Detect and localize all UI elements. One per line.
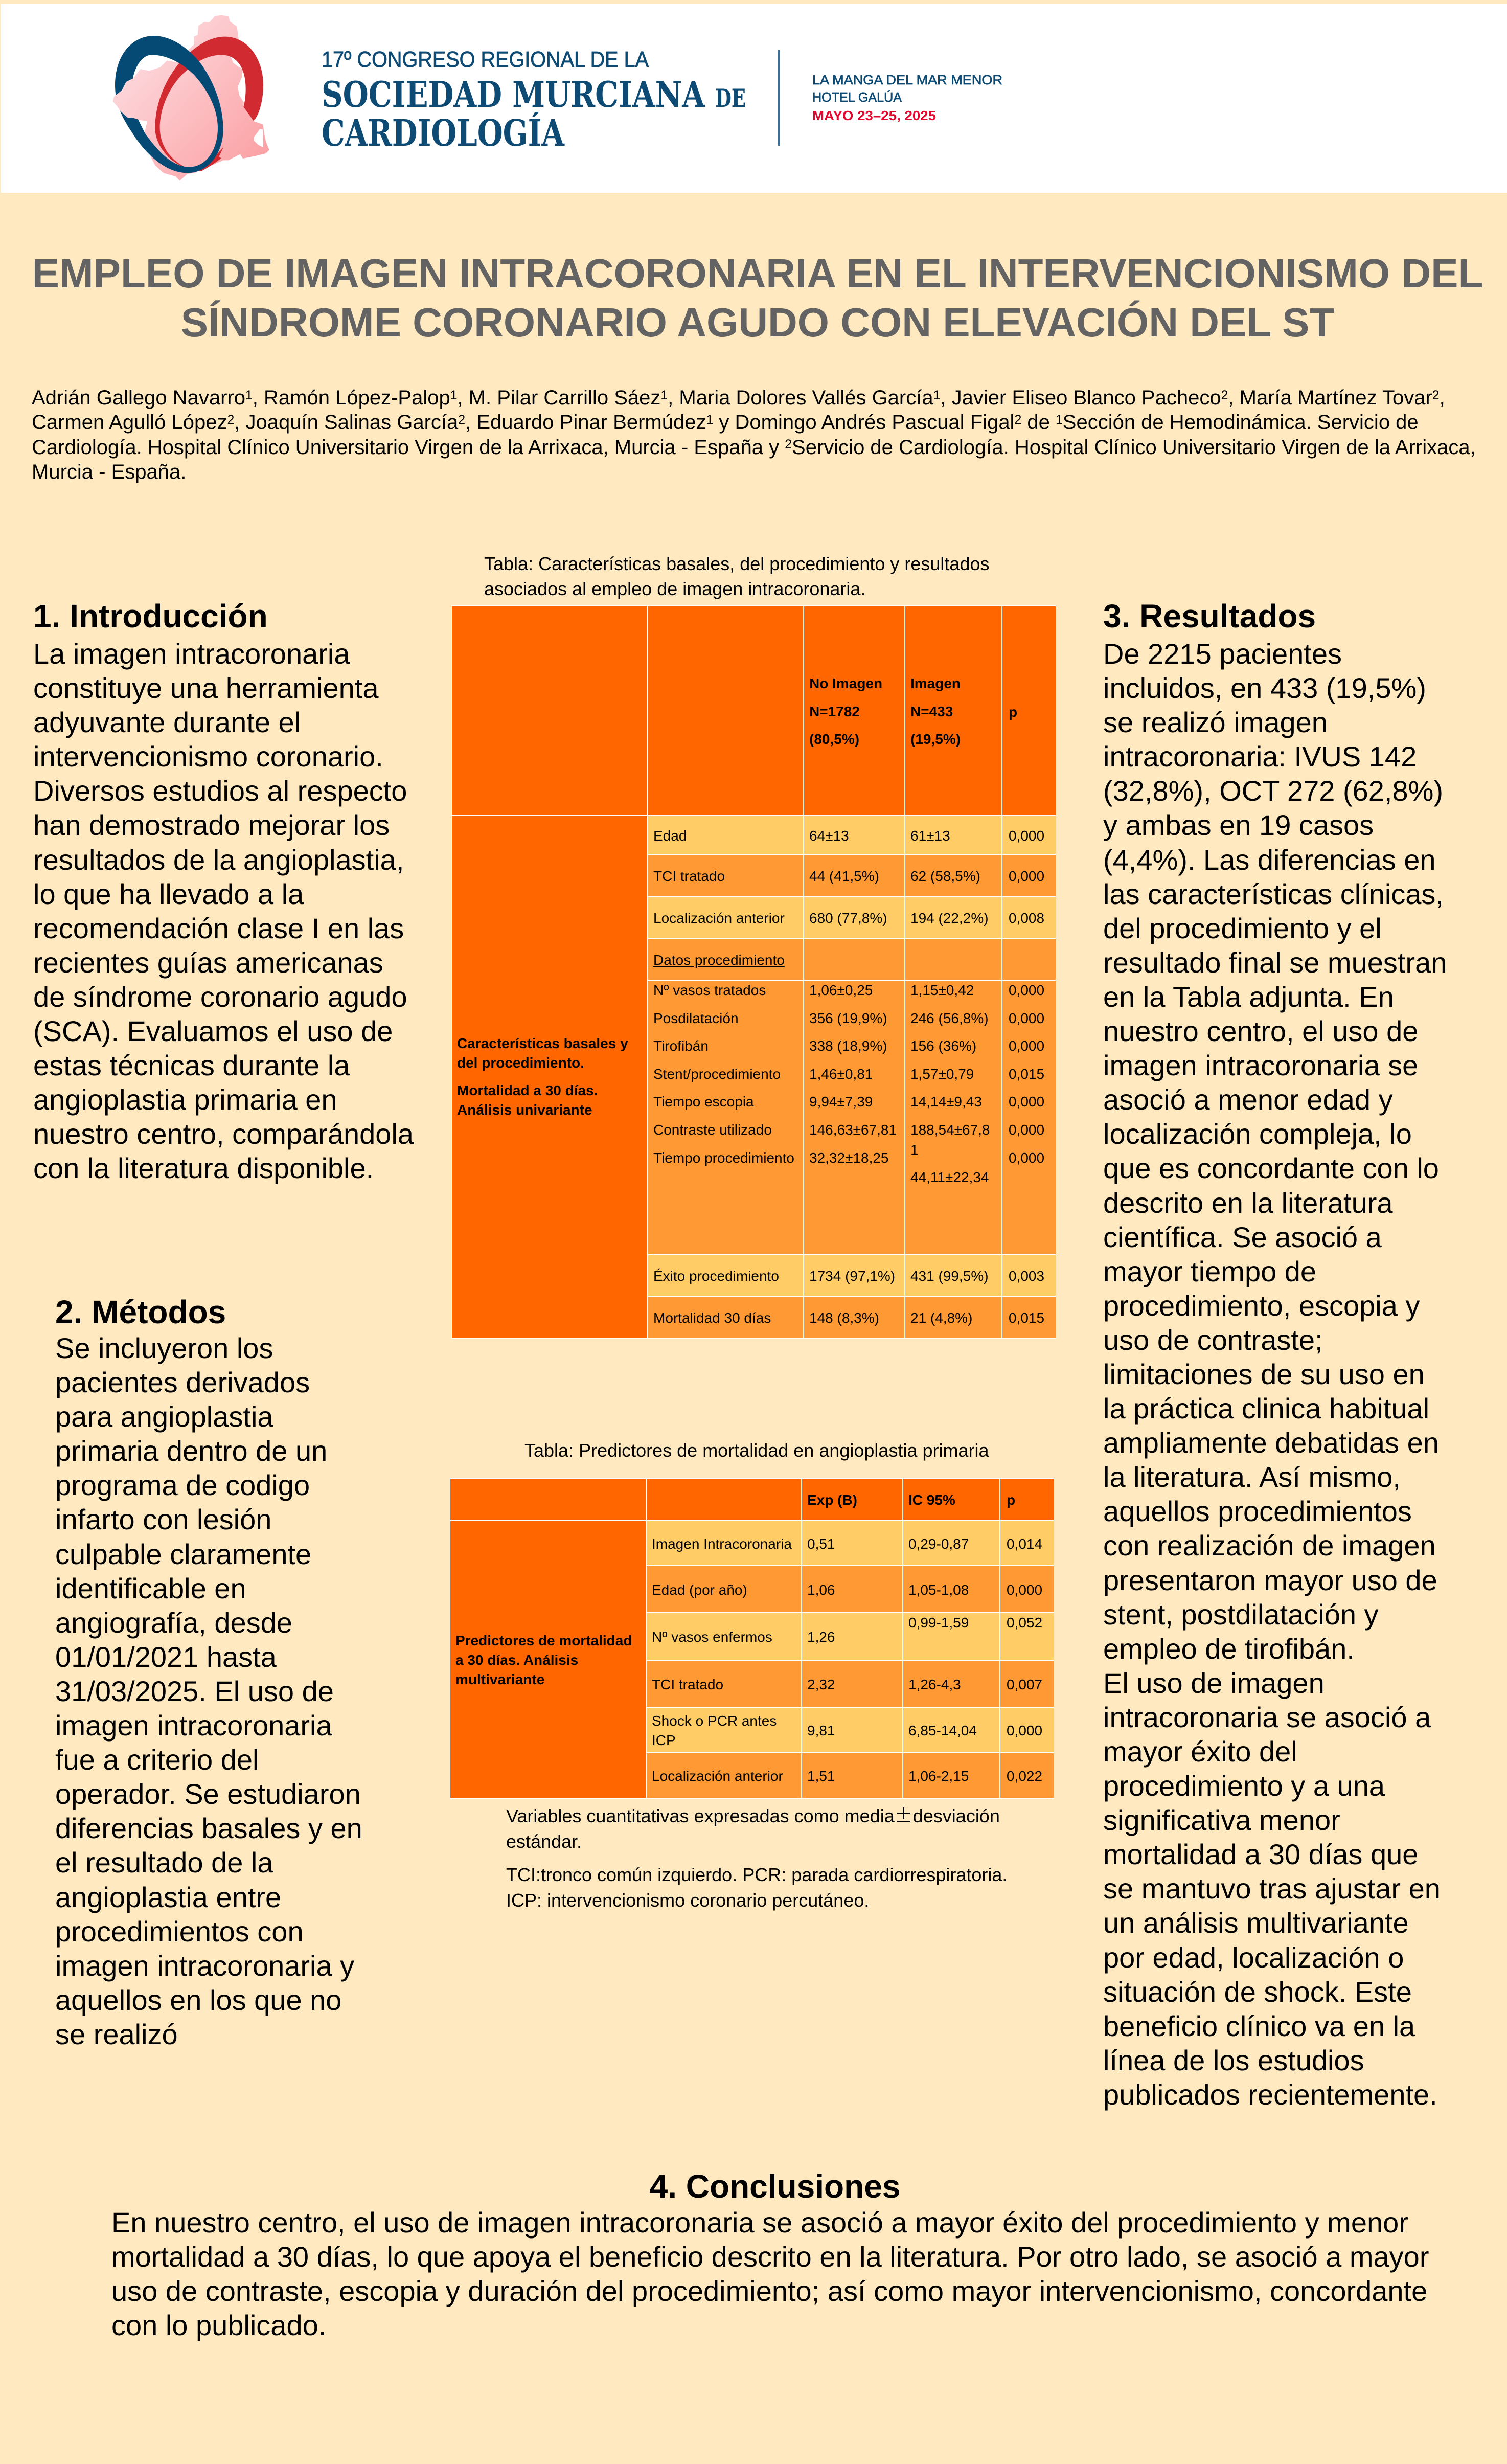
text: métodos: diferencias basales y en (55, 1812, 362, 1844)
text: resultados: resultado final se muestran (1103, 946, 1447, 979)
row: mortalidad 30 días: 21 (4,8%) (910, 1310, 972, 1325)
text: resultados: las características clínicas, (1103, 878, 1444, 910)
table header row: (80,5%) (809, 731, 859, 747)
text: conclusiones (111, 2205, 1429, 2342)
text: resultados: línea de los estudios (1103, 2044, 1364, 2076)
text: resultados: (4,4%). Las diferencias en (1103, 844, 1436, 876)
text: resultados: empleo de tirofibán. (1103, 1633, 1355, 1665)
table header row (452, 606, 1056, 815)
rows: variables del procedimiento: 1,46±0,81 (809, 1066, 873, 1082)
table: predictores de mortalidad (450, 1478, 1054, 1799)
text: métodos: identificable en (55, 1572, 246, 1604)
text: conclusiones: mortalidad a 30 días, lo que apoya el beneficio descrito en la literatura. Por otro lado, se asoció a mayor (111, 2241, 1429, 2273)
rows: variables del procedimiento: Contraste utilizado (653, 1122, 772, 1138)
table header row: (19,5%) (910, 731, 961, 747)
text: resultados: se realizó imagen (1103, 706, 1328, 738)
text: resultados: situación de shock. Este (1103, 1976, 1412, 2008)
text: introducción: con la literatura disponible. (33, 1152, 374, 1184)
row label: características basales y del procedimiento (452, 816, 647, 1338)
text: métodos: programa de codigo (55, 1469, 310, 1501)
rows: variables del procedimiento: Tirofibán (653, 1038, 709, 1054)
row: datos procedimiento (648, 939, 1056, 980)
text: resultados: uso de contraste; (1103, 1324, 1323, 1356)
row: vasos enfermos: Nº vasos enfermos (652, 1629, 772, 1645)
text: métodos: primaria dentro de un (55, 1435, 327, 1467)
text: métodos: procedimientos con (55, 1915, 304, 1948)
row: shock o PCR: ICP (652, 1732, 676, 1748)
row: edad: 61±13 (910, 827, 950, 844)
row: vasos enfermos (647, 1613, 1054, 1660)
text: métodos: imagen intracoronaria y (55, 1950, 354, 1982)
table: características basales (451, 605, 1056, 1339)
row: edad por año: 0,000 (1007, 1582, 1042, 1597)
text: resultados: limitaciones de su uso en (1103, 1358, 1425, 1390)
authors and affiliations: Carmen Agulló López2, Joaquín Salinas García2, Eduardo Pinar Bermúdez1 y Domingo Andrés Pascual Figal2 de 1Sección de Hemodinámica. Servicio de (32, 411, 1419, 434)
text: resultados: intracoronaria se asoció a (1103, 1701, 1431, 1733)
caption: tabla características basales (484, 553, 990, 599)
text: resultados: De 2215 pacientes (1103, 638, 1342, 670)
row: TCI tratado: 62 (58,5%) (910, 868, 980, 884)
text: métodos: infarto con lesión (55, 1503, 271, 1535)
table header row: N=433 (910, 704, 953, 719)
row: TCI tratado (647, 1661, 1054, 1707)
venue and date: LA MANGA DEL MAR MENOR (812, 72, 1002, 87)
table header row: Imagen (910, 675, 961, 691)
title: EMPLEO DE IMAGEN INTRACORONARIA EN EL INTERVENCIONISMO DEL (32, 251, 1483, 296)
row: vasos enfermos: 1,26 (807, 1629, 835, 1645)
row: edad por año: 1,05-1,08 (908, 1582, 969, 1597)
row: imagen intracoronaria: 0,014 (1007, 1536, 1042, 1551)
authors and affiliations (32, 387, 1476, 483)
text: resultados: (32,8%), OCT 272 (62,8%) (1103, 775, 1443, 807)
text: resultados: se mantuvo tras ajustar en (1103, 1872, 1441, 1905)
authors and affiliations: Murcia - España. (32, 461, 186, 483)
text: métodos: angiografía, desde (55, 1607, 292, 1639)
text: resultados: del procedimiento y el (1103, 912, 1382, 944)
text: resultados: localización compleja, lo (1103, 1118, 1412, 1150)
row: TCI tratado: 44 (41,5%) (809, 868, 879, 884)
table header row: p (1009, 704, 1017, 720)
row label: características basales y del procedimiento: del procedimiento. (457, 1055, 584, 1071)
row: imagen intracoronaria (647, 1521, 1054, 1565)
text: métodos (55, 1332, 362, 2050)
text: resultados: imagen intracoronaria se (1103, 1049, 1418, 1081)
text: resultados: científica. Se asoció a (1103, 1221, 1382, 1253)
heading: 3. Resultados: 3. Resultados (1103, 598, 1316, 635)
row: TCI tratado: TCI tratado (652, 1676, 723, 1692)
row: shock o PCR: Shock o PCR antes (652, 1713, 777, 1729)
row: edad: Edad (653, 827, 687, 844)
text: introducción: nuestro centro, comparándola (33, 1118, 414, 1150)
row: TCI tratado: TCI tratado (653, 868, 725, 884)
row: localización anterior: 680 (77,8%) (809, 910, 887, 926)
rows: variables del procedimiento: Stent/procedimiento (653, 1066, 781, 1082)
row: TCI tratado: 2,32 (807, 1676, 835, 1692)
row: localización anterior: 194 (22,2%) (910, 910, 989, 926)
text: resultados: ampliamente debatidas en (1103, 1427, 1439, 1459)
text: métodos: operador. Se estudiaron (55, 1778, 361, 1810)
table header row (450, 1479, 1054, 1520)
heading: 1. Introducción: 1. Introducción (33, 598, 268, 635)
row: éxito procedimiento (648, 1255, 1056, 1296)
row: éxito procedimiento: Éxito procedimiento (653, 1268, 779, 1284)
row: mortalidad 30 días: 0,015 (1009, 1310, 1044, 1325)
row: localización anterior: Localización anterior (653, 910, 785, 926)
row: shock o PCR: 9,81 (807, 1723, 835, 1738)
text: resultados: El uso de imagen (1103, 1667, 1325, 1699)
heading: 4. Conclusiones: 4. Conclusiones (650, 2168, 900, 2205)
text: resultados: significativa menor (1103, 1804, 1340, 1836)
text: introducción: La imagen intracoronaria (33, 638, 350, 670)
row: localización anterior (648, 897, 1056, 938)
row: éxito procedimiento: 431 (99,5%) (910, 1268, 989, 1284)
row: TCI tratado: 0,007 (1007, 1676, 1042, 1692)
venue and date (812, 72, 1002, 123)
row: TCI tratado: 1,26-4,3 (908, 1676, 961, 1692)
rows: variables del procedimiento: 1 (910, 1142, 919, 1158)
text: resultados: presentaron mayor uso de (1103, 1564, 1437, 1596)
row: éxito procedimiento: 1734 (97,1%) (809, 1268, 895, 1284)
table header row: Exp (B) (807, 1492, 857, 1508)
text: conclusiones: En nuestro centro, el uso de imagen intracoronaria se asoció a mayor éxito del procedimiento y menor (111, 2206, 1408, 2239)
row: localización anterior: 0,008 (1009, 910, 1044, 926)
text: métodos: fue a criterio del (55, 1744, 259, 1776)
caption: tabla características basales: Tabla: Características basales, del procedimiento y resultados (484, 553, 990, 574)
row: shock o PCR: 6,85-14,04 (908, 1723, 977, 1738)
table footnotes (506, 1803, 1007, 1913)
rows: variables del procedimiento: 44,11±22,34 (910, 1169, 989, 1185)
rows: variables del procedimiento: 0,015 (1009, 1066, 1044, 1082)
table footnotes: Variables cuantitativas expresadas como media±desviación (506, 1801, 1000, 1828)
text: introducción: han demostrado mejorar los (33, 809, 390, 841)
text: conclusiones: con lo publicado. (111, 2309, 326, 2341)
text: métodos: angioplastia entre (55, 1881, 281, 1913)
rows: variables del procedimiento: 338 (18,9%) (809, 1038, 887, 1054)
table footnotes: TCI:tronco común izquierdo. PCR: parada cardiorrespiratoria. (506, 1864, 1007, 1885)
row: localización anterior: 1,51 (807, 1768, 835, 1784)
row: éxito procedimiento: 0,003 (1009, 1268, 1044, 1284)
row: mortalidad 30 días: Mortalidad 30 días (653, 1310, 771, 1325)
row label: predictores de mortalidad a 30 días: a 30 días. Análisis (455, 1652, 578, 1668)
row: TCI tratado (648, 855, 1056, 896)
table header row: p (1007, 1492, 1015, 1508)
icon: logo heart rings over Murcia map (113, 15, 269, 180)
row: mortalidad 30 días: 148 (8,3%) (809, 1310, 879, 1325)
row: edad (648, 816, 1056, 854)
text: métodos: culpable claramente (55, 1538, 311, 1570)
text: introducción (33, 638, 414, 1184)
text: métodos: el resultado de la (55, 1846, 273, 1879)
text: introducción: angioplastia primaria en (33, 1083, 337, 1116)
table footnotes: estándar. (506, 1831, 582, 1852)
text: resultados: asoció a menor edad y (1103, 1083, 1393, 1116)
row label: predictores de mortalidad a 30 días: multivariante (455, 1671, 544, 1687)
text: resultados: beneficio clínico va en la (1103, 2010, 1415, 2042)
caption: tabla características basales: asociados al empleo de imagen intracoronaria. (484, 578, 865, 599)
row: imagen intracoronaria: 0,29-0,87 (908, 1536, 969, 1551)
row: vasos enfermos: 0,052 (1007, 1615, 1042, 1631)
rows: variables del procedimiento: 356 (19,9%) (809, 1010, 887, 1026)
rows: variables del procedimiento: Tiempo escopia (653, 1094, 754, 1110)
text: introducción: (SCA). Evaluamos el uso de (33, 1015, 393, 1047)
venue and date: HOTEL GALÚA (812, 89, 902, 105)
text: resultados (1103, 637, 1447, 2112)
row: localización anterior: Localización anterior (652, 1768, 783, 1784)
row label: características basales y del procedimiento: Características basales y (457, 1035, 628, 1051)
caption: tabla predictores: Tabla: Predictores de mortalidad en angioplastia primaria (524, 1440, 989, 1461)
text: resultados: stent, postdilatación y (1103, 1598, 1379, 1631)
table header row: No Imagen (809, 675, 882, 691)
text: métodos: 31/03/2025. El uso de (55, 1675, 334, 1707)
rows: variables del procedimiento: 156 (36%) (910, 1038, 976, 1054)
rows: variables del procedimiento: 0,000 (1009, 982, 1044, 998)
text: resultados: por edad, localización o (1103, 1941, 1404, 1974)
row: localización anterior: 0,022 (1007, 1768, 1042, 1784)
text: resultados: descrito en la literatura (1103, 1186, 1393, 1219)
row: edad: 64±13 (809, 827, 849, 844)
text: métodos: 01/01/2021 hasta (55, 1641, 277, 1673)
rows: variables del procedimiento (648, 981, 1056, 1254)
text: resultados: procedimiento y a una (1103, 1770, 1385, 1802)
text: resultados: en la Tabla adjunta. En (1103, 981, 1394, 1013)
rows: variables del procedimiento: 0,000 (1009, 1094, 1044, 1110)
rows: variables del procedimiento: 0,000 (1009, 1122, 1044, 1138)
text: introducción: resultados de la angioplastia, (33, 844, 404, 876)
text: introducción: constituye una herramienta (33, 672, 378, 704)
text: introducción: estas técnicas durante la (33, 1049, 350, 1081)
row label: características basales y del procedimiento: Análisis univariante (457, 1102, 592, 1118)
text: resultados: nuestro centro, el uso de (1103, 1015, 1418, 1047)
text: introducción: lo que ha llevado a la (33, 878, 304, 910)
text: resultados: la práctica clinica habitual (1103, 1392, 1429, 1425)
text: introducción: recientes guías americanas (33, 946, 383, 979)
row: imagen intracoronaria: 0,51 (807, 1536, 835, 1551)
row: shock o PCR: 0,000 (1007, 1723, 1042, 1738)
row label: predictores de mortalidad a 30 días (450, 1521, 646, 1798)
text: resultados: con realización de imagen (1103, 1529, 1436, 1562)
text: métodos: se realizó (55, 2018, 178, 2050)
congress title (322, 47, 746, 154)
row: edad por año: Edad (por año) (652, 1582, 747, 1597)
text: resultados: mortalidad a 30 días que (1103, 1838, 1418, 1870)
row: localización anterior (647, 1753, 1054, 1798)
row: shock o PCR (647, 1708, 1054, 1752)
authors and affiliations: Adrián Gallego Navarro1, Ramón López-Palop1, M. Pilar Carrillo Sáez1, Maria Dolores Vallés García1, Javier Eliseo Blanco Pacheco2, María Martínez Tovar2, (32, 387, 1445, 409)
text: resultados: intracoronaria: IVUS 142 (1103, 740, 1417, 773)
rows: variables del procedimiento: 1,15±0,42 (910, 982, 974, 998)
row label: predictores de mortalidad a 30 días: Predictores de mortalidad (455, 1633, 632, 1648)
rows: variables del procedimiento: Nº vasos tratados (653, 982, 766, 998)
row label: características basales y del procedimiento: Mortalidad a 30 días. (457, 1082, 598, 1098)
congress logo and name (112, 15, 1002, 181)
rows: variables del procedimiento: 0,000 (1009, 1010, 1044, 1026)
row: imagen intracoronaria: Imagen Intracoronaria (652, 1536, 792, 1551)
rows: variables del procedimiento: 188,54±67,8 (910, 1122, 990, 1138)
text: métodos: imagen intracoronaria (55, 1709, 332, 1742)
rows: variables del procedimiento: 0,000 (1009, 1150, 1044, 1166)
text: resultados: incluidos, en 433 (19,5%) (1103, 672, 1426, 704)
text: introducción: recomendación clase I en las (33, 912, 404, 944)
text: resultados: mayor éxito del (1103, 1735, 1297, 1768)
heading: 2. Métodos: 2. Métodos (55, 1294, 226, 1330)
rows: variables del procedimiento: 146,63±67,81 (809, 1122, 897, 1138)
text: resultados: y ambas en 19 casos (1103, 809, 1374, 841)
rows: variables del procedimiento: 9,94±7,39 (809, 1094, 873, 1110)
row: vasos enfermos: 0,99-1,59 (908, 1615, 969, 1631)
congress title: CARDIOLOGÍA (322, 111, 565, 154)
header banner (1, 4, 1507, 193)
text: métodos: pacientes derivados (55, 1366, 310, 1398)
congress title: 17º CONGRESO REGIONAL DE LA (322, 47, 649, 72)
table footnotes: ICP: intervencionismo coronario percutáneo. (506, 1890, 869, 1911)
text: introducción: adyuvante durante el (33, 706, 301, 738)
text: resultados: aquellos procedimientos (1103, 1495, 1412, 1527)
row: TCI tratado: 0,000 (1009, 868, 1044, 884)
venue and date: MAYO 23–25, 2025 (812, 108, 936, 123)
text: resultados: un análisis multivariante (1103, 1907, 1409, 1939)
row: datos procedimiento: Datos procedimiento (653, 952, 785, 967)
title: SÍNDROME CORONARIO AGUDO CON ELEVACIÓN DEL ST (181, 300, 1334, 345)
text: métodos: aquellos en los que no (55, 1984, 341, 2016)
text: resultados: la literatura. Así mismo, (1103, 1461, 1401, 1493)
row: edad por año: 1,06 (807, 1582, 835, 1597)
rows: variables del procedimiento: 14,14±9,43 (910, 1094, 982, 1110)
text: introducción: intervencionismo coronario. (33, 740, 383, 773)
authors and affiliations: Cardiología. Hospital Clínico Universitario Virgen de la Arrixaca, Murcia - España y 2Servicio de Cardiología. Hospital Clínico Universitario Virgen de la Arrixaca, (32, 436, 1476, 459)
rows: variables del procedimiento: 32,32±18,25 (809, 1150, 889, 1166)
row: mortalidad 30 días (648, 1297, 1056, 1338)
table header row: IC 95% (908, 1492, 955, 1508)
row: edad por año (647, 1566, 1054, 1612)
congress title: DE (715, 83, 746, 113)
rows: variables del procedimiento: 1,06±0,25 (809, 982, 873, 998)
rows: variables del procedimiento: 0,000 (1009, 1038, 1044, 1054)
row: edad: 0,000 (1009, 827, 1044, 844)
rows: variables del procedimiento: 246 (56,8%) (910, 1010, 989, 1026)
rows: variables del procedimiento: Tiempo procedimiento (653, 1150, 794, 1166)
rows: variables del procedimiento: Posdilatación (653, 1010, 739, 1026)
text: métodos: para angioplastia (55, 1400, 273, 1433)
text: introducción: Diversos estudios al respecto (33, 775, 407, 807)
rows: variables del procedimiento: 1,57±0,79 (910, 1066, 974, 1082)
text: resultados: publicados recientemente. (1103, 2078, 1437, 2111)
row: localización anterior: 1,06-2,15 (908, 1768, 969, 1784)
text: introducción: de síndrome coronario agudo (33, 981, 407, 1013)
text: resultados: que es concordante con lo (1103, 1152, 1439, 1184)
text: resultados: procedimiento, escopia y (1103, 1290, 1420, 1322)
title (32, 251, 1483, 345)
congress title: SOCIEDAD MURCIANA (322, 74, 705, 116)
text: métodos: Se incluyeron los (55, 1332, 273, 1364)
text: resultados: mayor tiempo de (1103, 1255, 1316, 1287)
table header row: N=1782 (809, 704, 860, 719)
text: conclusiones: uso de contraste, escopia y duración del procedimiento; así como mayor intervencionismo, concordante (111, 2275, 1427, 2307)
